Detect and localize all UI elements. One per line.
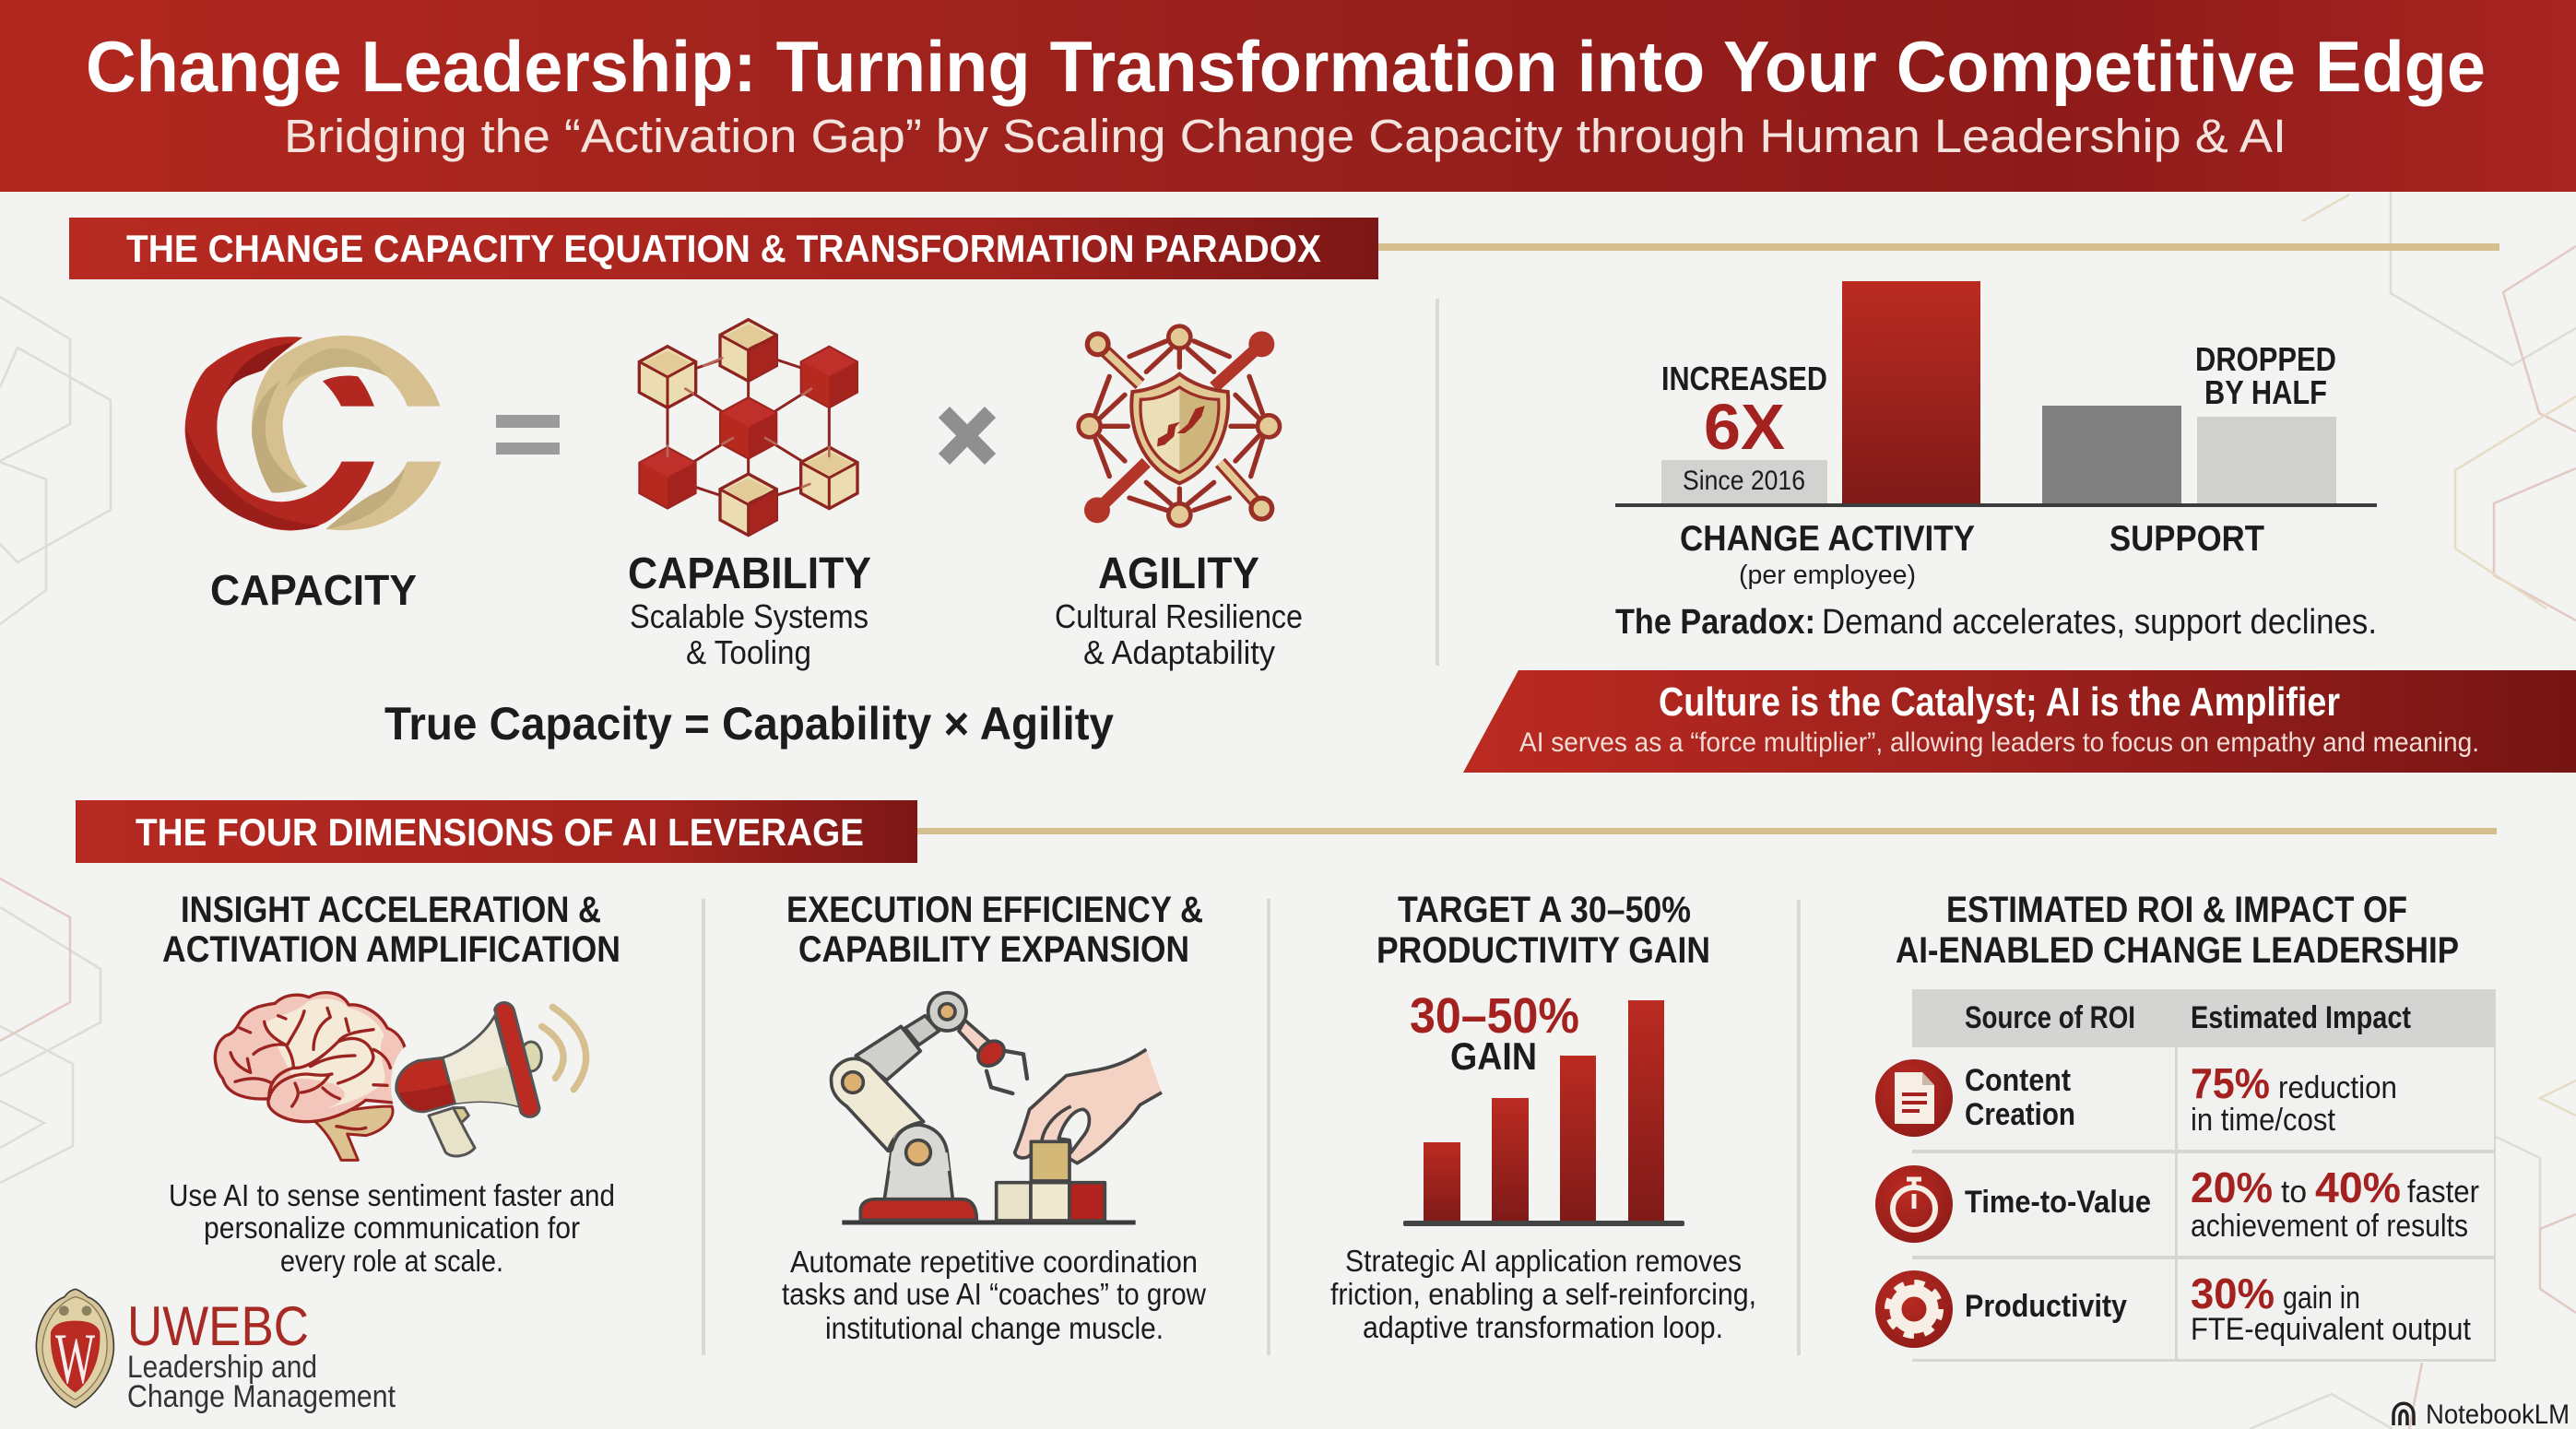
panel: execution efficiency [782,890,1206,1345]
paradox statement: Demand accelerates, support declines. [1822,603,2377,642]
axis label: change activity: CHANGE ACTIVITY [1680,519,1975,559]
label: increased 6X: Since 2016 [1683,466,1805,496]
table grid [1912,989,2496,1362]
callout: culture catalyst: Culture is the Catalyst; AI is the Amplifier [1659,679,2340,725]
label: increased 6X [1661,360,1827,496]
row: time-to-value: achievement of results [2191,1209,2468,1244]
description: Strategic AI application removes [1345,1244,1742,1278]
row: productivity: Productivity [1965,1289,2127,1324]
row: time-to-value [1875,1163,2479,1244]
label: increased 6X: 6X [1704,391,1785,463]
icon: megaphone [396,1002,586,1156]
callout: culture catalyst [1463,670,2576,773]
row: content creation: in time/cost [2191,1103,2335,1138]
icon: capacity interlocked C [185,336,441,530]
table header: Source of ROI [1965,1000,2135,1035]
label: capability: CAPABILITY [628,549,871,598]
table header: Estimated Impact [2191,1000,2411,1035]
description: tasks and use AI “coaches” to grow [782,1277,1206,1311]
axis label: change activity: (per employee) [1739,561,1916,590]
bar chart [1615,281,2377,507]
icon: equals sign [496,415,560,455]
icon: notebook arcs [2393,1403,2414,1425]
header banner [0,0,2576,192]
subtitle: Bridging the “Activation Gap” by Scaling Change Capacity through Human Leadership & AI [284,110,2286,162]
row: time-to-value: to [2281,1175,2307,1210]
description: every role at scale. [280,1244,503,1278]
row: content creation: Creation [1965,1097,2075,1132]
row: content creation: 75% [2191,1059,2270,1107]
heading [1896,890,2459,971]
label: increased 6X: INCREASED [1661,360,1827,397]
label: capability: Scalable Systems [630,597,869,635]
icon: multiply sign [944,412,990,459]
logo: UWEBC: UWEBC [127,1295,309,1357]
row: time-to-value: Time-to-Value [1965,1185,2151,1220]
row: content creation [1875,1059,2397,1138]
label: dropped by half: DROPPED [2195,340,2336,378]
row: time-to-value: 20% [2191,1163,2273,1211]
heading: INSIGHT ACCELERATION & [181,890,601,930]
heading [786,890,1203,970]
row: time-to-value: 40% [2315,1163,2401,1211]
callout: culture catalyst: AI serves as a “force multiplier”, allowing leaders to focus on empathy and meaning. [1519,727,2479,758]
title: Change Leadership: Turning Transformation into Your Competitive Edge [86,26,2486,107]
axis label: change activity [1680,519,1975,590]
section heading: four dimensions: THE FOUR DIMENSIONS OF AI LEVERAGE [136,810,864,854]
row: productivity: gain in [2283,1281,2360,1316]
description [1330,1244,1756,1344]
icon: gear [1875,1270,1953,1348]
icon: brain [215,993,412,1160]
row: time-to-value: faster [2407,1175,2479,1210]
label: agility [1055,549,1303,671]
icon: stopwatch [1875,1165,1953,1243]
panel: transformation paradox chart [1615,281,2377,642]
row: productivity: FTE-equivalent output [2191,1312,2471,1347]
label: agility: Cultural Resilience [1055,597,1303,635]
description: Automate repetitive coordination [790,1245,1198,1279]
panel: insight acceleration [162,890,620,1278]
logo: UWEBC [36,1289,396,1414]
description [782,1245,1206,1345]
heading: PRODUCTIVITY GAIN [1377,930,1710,971]
label: dropped by half [2195,340,2336,411]
bar chart: rising bars [1403,1000,1684,1226]
axis label: support: SUPPORT [2109,519,2264,559]
description: friction, enabling a self-reinforcing, [1330,1277,1756,1311]
heading: AI-ENABLED CHANGE LEADERSHIP [1896,930,2459,971]
icon: crest [36,1289,113,1408]
section heading: change capacity equation [69,218,2499,279]
heading: EXECUTION EFFICIENCY & [786,890,1203,930]
paradox statement [1615,603,2377,642]
row: content creation: reduction [2278,1070,2397,1105]
table header [1965,1000,2411,1035]
icon: crest: W [55,1318,95,1399]
stat: 30-50% gain [1410,988,1579,1078]
label: agility: & Adaptability [1083,633,1275,671]
description [169,1178,615,1278]
label: agility: AGILITY [1098,549,1259,598]
section heading: change capacity equation: THE CHANGE CAPACITY EQUATION & TRANSFORMATION PARADOX [126,227,1321,270]
description: institutional change muscle. [825,1311,1164,1345]
label: capability: & Tooling [686,633,811,671]
panel: productivity gain [1330,890,1756,1344]
icon: capability cube network [639,320,857,536]
icon: document [1875,1059,1953,1137]
section heading: four dimensions [76,800,2497,863]
row: productivity [1875,1270,2471,1348]
heading: ESTIMATED ROI & IMPACT OF [1946,890,2407,930]
icon: agility shield network [1079,326,1280,526]
panel: ROI table [1875,890,2496,1362]
heading: TARGET A 30–50% [1398,890,1691,930]
row: content creation: Content [1965,1063,2071,1098]
logo: UWEBC: Leadership and [127,1350,317,1385]
label: capability [628,549,871,671]
label: dropped by half: BY HALF [2204,373,2327,411]
description: adaptive transformation loop. [1363,1310,1723,1344]
stat: 30-50% gain: GAIN [1450,1034,1537,1078]
heading: ACTIVATION AMPLIFICATION [162,929,620,970]
logo: UWEBC: Change Management [127,1379,396,1414]
stat: 30-50% gain: 30–50% [1410,988,1579,1044]
panel: capacity equation [185,320,1303,750]
description: personalize communication for [204,1211,580,1245]
row: productivity: 30% [2191,1270,2275,1317]
icon: robot arm and hand [832,993,1162,1222]
paradox statement: The Paradox: [1615,603,1815,642]
heading: CAPABILITY EXPANSION [798,929,1189,970]
heading [162,890,620,970]
formula: True Capacity = Capability × Agility [384,698,1114,750]
heading [1377,890,1710,971]
description: Use AI to sense sentiment faster and [169,1178,615,1212]
label: capacity: CAPACITY [210,566,417,614]
